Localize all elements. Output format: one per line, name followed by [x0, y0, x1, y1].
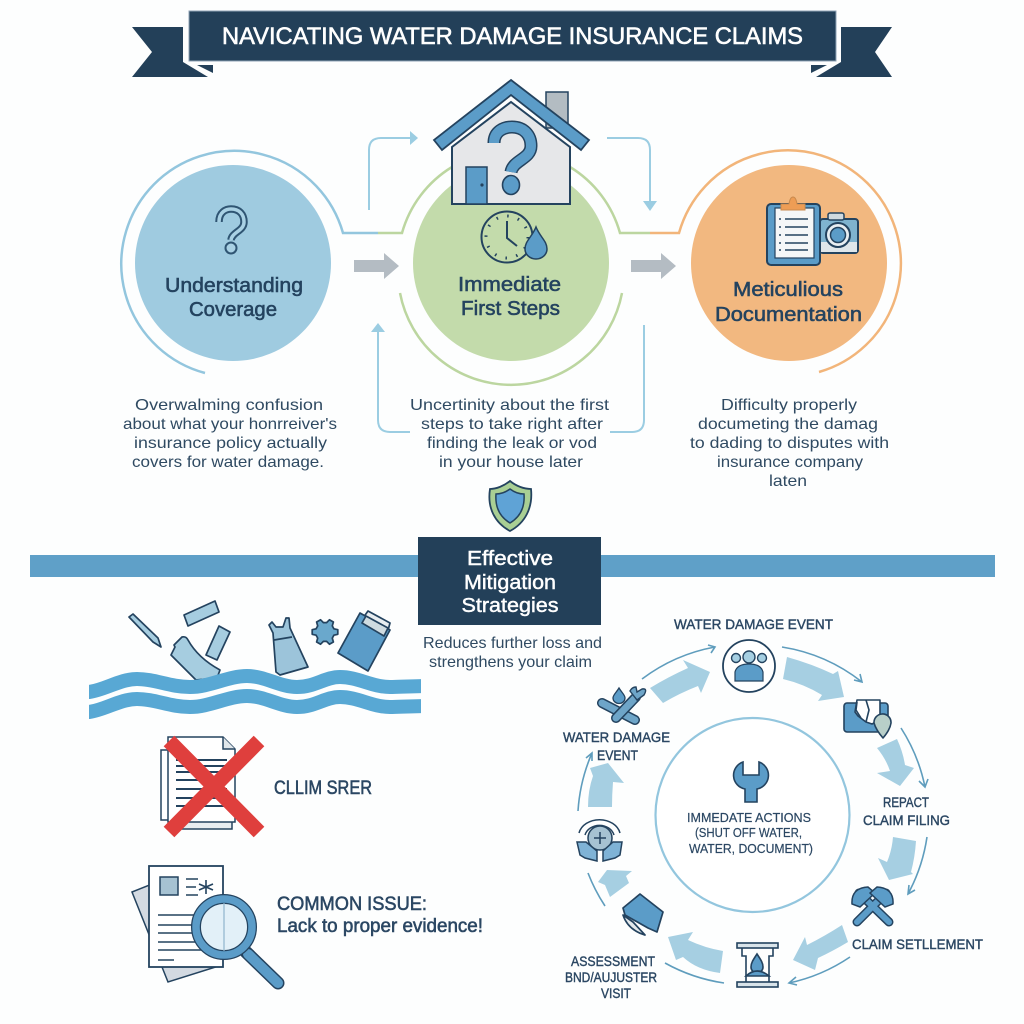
- text block: mitigation benefit: Reduces further loss and: [423, 635, 602, 652]
- label: water damage event left: [563, 730, 670, 763]
- label: water damage event left: WATER DAMAGE: [563, 730, 670, 745]
- icon: damaged couch: [844, 700, 891, 738]
- text block: coverage problem: insurance policy actually: [134, 435, 327, 452]
- heading: meticulous documentation: Meticulious: [733, 279, 843, 301]
- label: water damage event top: WATER DAMAGE EVENT: [674, 617, 833, 632]
- text block: documentation problem: to dading to disputes with: [690, 435, 889, 452]
- icon: camera: [820, 213, 858, 253]
- icon: wrench and wrench bar with drop: [602, 687, 646, 720]
- connector rings and loop arrows: [121, 131, 901, 432]
- label: repact claim filing: [863, 795, 950, 828]
- text block: first steps problem: finding the leak or vod: [427, 435, 597, 452]
- label: assessment and adjuster visit: BND/AUJUSTER: [565, 970, 657, 985]
- text: immediate actions: IMMEDATE ACTIONS: [687, 810, 811, 825]
- text: immediate actions: WATER, DOCUMENT): [689, 841, 813, 856]
- text block: first steps problem: [410, 397, 610, 471]
- panel: meticulous documentation: [691, 165, 887, 361]
- label: water damage event left: EVENT: [597, 748, 638, 763]
- title: NAVICATING WATER DAMAGE INSURANCE CLAIMS: [222, 23, 803, 50]
- text block: documentation problem: insurance company: [717, 454, 863, 471]
- text block: coverage problem: Overwalming confusion: [135, 397, 323, 414]
- icon: people: [723, 640, 775, 692]
- label: assessment and adjuster visit: VISIT: [601, 986, 631, 1001]
- heading: immediate first steps: [458, 274, 561, 320]
- icon: center wrench: [734, 762, 768, 802]
- text block: documentation problem: laten: [769, 473, 807, 490]
- icon: crossed hammers: [852, 887, 893, 922]
- icon: floating debris: [129, 601, 390, 680]
- icon: crossed-out document: [161, 737, 259, 832]
- label: repact claim filing: CLAIM FILING: [863, 813, 950, 828]
- icon: hands holding gauge: [577, 820, 622, 861]
- text block: documentation problem: [690, 397, 889, 490]
- text block: first steps problem: Uncertinity about the first: [410, 397, 610, 414]
- icon: question mark: [219, 209, 244, 254]
- icon: house with question mark: [434, 80, 589, 204]
- icon: clipboard: [767, 197, 820, 265]
- text: immediate actions: [687, 810, 813, 856]
- icon: drop in frame: [737, 943, 778, 987]
- panel: effective mitigation strategies: Effective: [467, 548, 553, 570]
- label: assessment and adjuster visit: [565, 954, 657, 1001]
- thin cycle arcs: [578, 645, 928, 985]
- text block: coverage problem: [123, 397, 337, 471]
- text block: documentation problem: documeting the damag: [698, 416, 878, 433]
- icon: water waves: [70, 676, 430, 712]
- label: claim error: CLLIM SRER: [274, 778, 372, 799]
- callout: common issue: COMMON ISSUE:: [277, 894, 427, 915]
- label: claim settlement: CLAIM SETLLEMENT: [852, 937, 983, 952]
- heading: understanding coverage: [165, 275, 303, 321]
- panel: effective mitigation strategies: [418, 537, 601, 625]
- heading: immediate first steps: Immediate: [458, 274, 561, 296]
- center circle: [656, 718, 850, 912]
- text block: first steps problem: in your house later: [439, 454, 584, 471]
- text block: mitigation benefit: [423, 635, 602, 671]
- label: assessment and adjuster visit: ASSESSMENT: [571, 954, 655, 969]
- heading: understanding coverage: Understanding: [165, 275, 303, 297]
- text: immediate actions: (SHUT OFF WATER,: [695, 825, 802, 840]
- heading: meticulous documentation: [715, 279, 862, 326]
- icon: shield: [489, 481, 531, 531]
- icon: blue tarp: [623, 894, 663, 935]
- callout: common issue: Lack to proper evidence!: [277, 916, 483, 937]
- text block: first steps problem: steps to take right after: [421, 416, 604, 433]
- heading: meticulous documentation: Documentation: [715, 304, 862, 326]
- callout: common issue: [277, 894, 483, 937]
- text block: coverage problem: covers for water damage.: [132, 454, 324, 471]
- panel: effective mitigation strategies: Mitigation: [464, 572, 556, 594]
- text block: documentation problem: Difficulty properly: [721, 397, 857, 414]
- heading: immediate first steps: First Steps: [461, 298, 560, 320]
- cycle arrows: [588, 657, 916, 973]
- icon: clock and drop: [482, 212, 547, 262]
- process cycle: [563, 617, 983, 1001]
- arrow: first steps to documentation: [631, 253, 676, 279]
- banner: [132, 11, 892, 77]
- icon: document with magnifier: [132, 866, 278, 983]
- panel: effective mitigation strategies: Strategies: [462, 595, 558, 617]
- text block: coverage problem: about what your honrreiver's: [123, 416, 337, 433]
- panel: immediate first steps: [413, 165, 609, 361]
- label: repact claim filing: REPACT: [883, 795, 929, 810]
- text block: mitigation benefit: strengthens your claim: [429, 654, 592, 671]
- panel: understanding coverage: [135, 165, 331, 361]
- arrow: coverage to first steps: [354, 253, 399, 279]
- heading: understanding coverage: Coverage: [189, 299, 277, 321]
- divider bar: [30, 555, 995, 577]
